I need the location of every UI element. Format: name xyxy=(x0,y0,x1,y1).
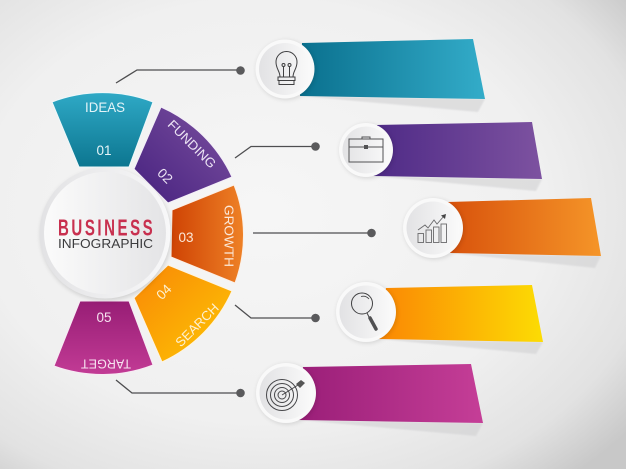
segment: ideas: 01 xyxy=(96,143,112,158)
icon badge: briefcase xyxy=(339,123,394,178)
segment: growth: 03 xyxy=(178,230,194,245)
central disc xyxy=(40,168,172,300)
segment: search xyxy=(134,265,232,362)
segment: target: 05 xyxy=(96,310,112,325)
segment: search: SEARCH xyxy=(172,300,222,350)
segment: funding: FUNDING xyxy=(165,117,219,171)
connector dots xyxy=(236,66,376,397)
banner: teal xyxy=(300,39,485,112)
title: business: BUSINESS xyxy=(58,215,153,241)
segment: funding: 02 xyxy=(154,165,176,187)
icon badge: target xyxy=(256,363,317,424)
icon badge: growth chart xyxy=(403,198,464,259)
segment: growth xyxy=(171,185,243,283)
connector lines xyxy=(116,70,371,393)
banner: orange xyxy=(448,198,601,268)
segment: search: 04 xyxy=(153,281,175,303)
banner: yellow xyxy=(378,285,543,354)
segment: target xyxy=(54,301,153,374)
banner: magenta xyxy=(298,364,483,436)
banner: purple xyxy=(373,122,542,191)
segment: growth: GROWTH xyxy=(222,205,236,267)
icon badge: magnifier xyxy=(336,282,397,343)
icon badge: light bulb xyxy=(256,40,316,100)
segment: ideas: IDEAS xyxy=(85,100,125,115)
segment: target: TARGET xyxy=(81,356,131,372)
segment: funding xyxy=(134,107,232,203)
subtitle: infographic: INFOGRAPHIC xyxy=(58,237,153,251)
segment: ideas xyxy=(52,93,153,167)
